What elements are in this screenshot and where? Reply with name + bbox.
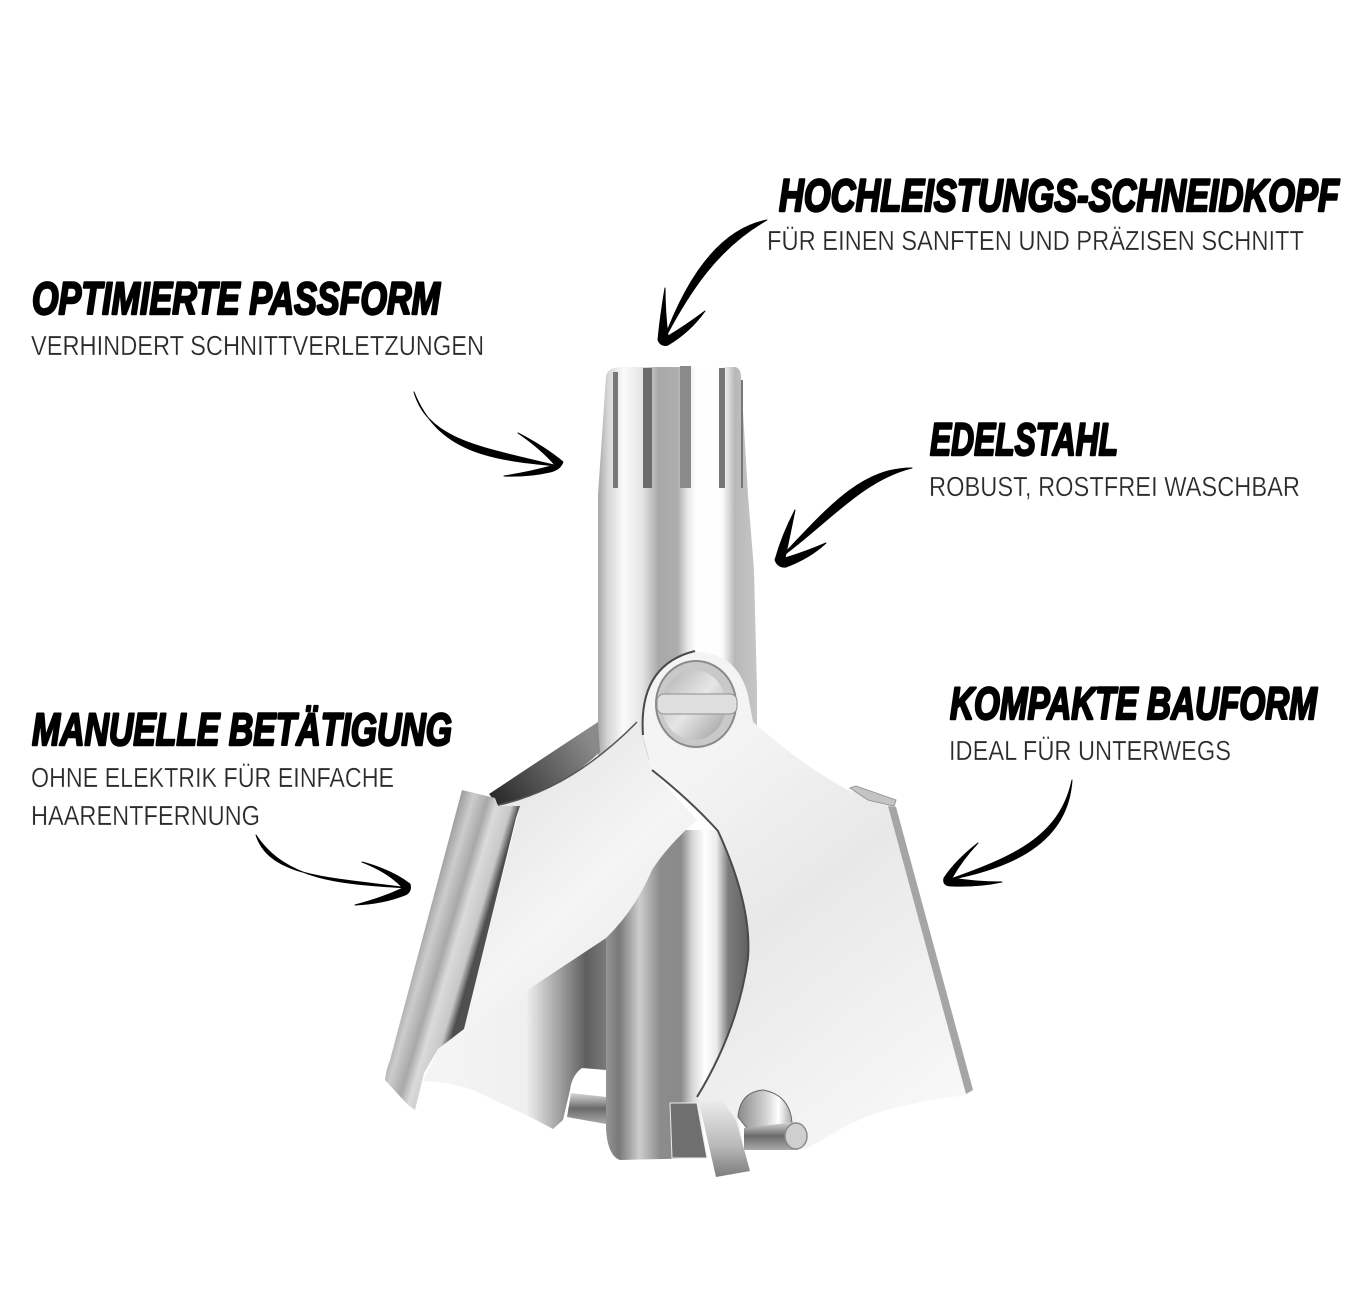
- heading: OPTIMIERTE PASSFORM: [32, 273, 441, 324]
- description: VERHINDERT SCHNITTVERLETZUNGEN: [31, 330, 484, 361]
- callout: manual operation: [31, 704, 452, 831]
- plate edge highlight: [643, 651, 748, 1097]
- heading: EDELSTAHL: [930, 414, 1118, 465]
- lever tab: [699, 1100, 750, 1177]
- hole: [738, 1090, 792, 1132]
- cutting head slots: [613, 366, 743, 488]
- arrow: compact: [944, 780, 1072, 886]
- description: OHNE ELEKTRIK FÜR EINFACHE: [31, 762, 394, 793]
- description: HAARENTFERNUNG: [31, 800, 260, 831]
- callout: compact design: [949, 678, 1318, 766]
- left pin: [567, 1093, 606, 1124]
- back left plate: [423, 938, 606, 1129]
- left plate edge highlight: [498, 722, 637, 805]
- description: IDEAL FÜR UNTERWEGS: [949, 735, 1231, 766]
- right plate with lever: [643, 652, 973, 1177]
- right pin: [744, 1122, 798, 1150]
- trimmer tube: [598, 367, 757, 760]
- tube notch: [670, 1103, 707, 1158]
- product illustration: nose hair trimmer: [385, 366, 973, 1177]
- lower tube: [606, 830, 752, 1160]
- arrow: cutting head: [658, 220, 767, 345]
- description: [31, 762, 394, 831]
- right plate side edge: [888, 806, 973, 1094]
- side tab: [850, 786, 896, 806]
- description: ROBUST, ROSTFREI WASCHBAR: [929, 471, 1300, 502]
- dark inner wing: [489, 722, 600, 808]
- left folded edge: [385, 790, 520, 1110]
- arrow: steel: [775, 468, 912, 567]
- callout: fit: [31, 273, 484, 361]
- left plate: [438, 722, 697, 1049]
- callout: stainless steel: [929, 414, 1300, 502]
- callout: cutting head: [767, 170, 1340, 256]
- pin cap: [785, 1123, 807, 1149]
- screw: [656, 661, 737, 747]
- arrow: fit: [414, 392, 563, 476]
- arrow: manual operation: [256, 835, 410, 905]
- heading: MANUELLE BETÄTIGUNG: [32, 704, 452, 755]
